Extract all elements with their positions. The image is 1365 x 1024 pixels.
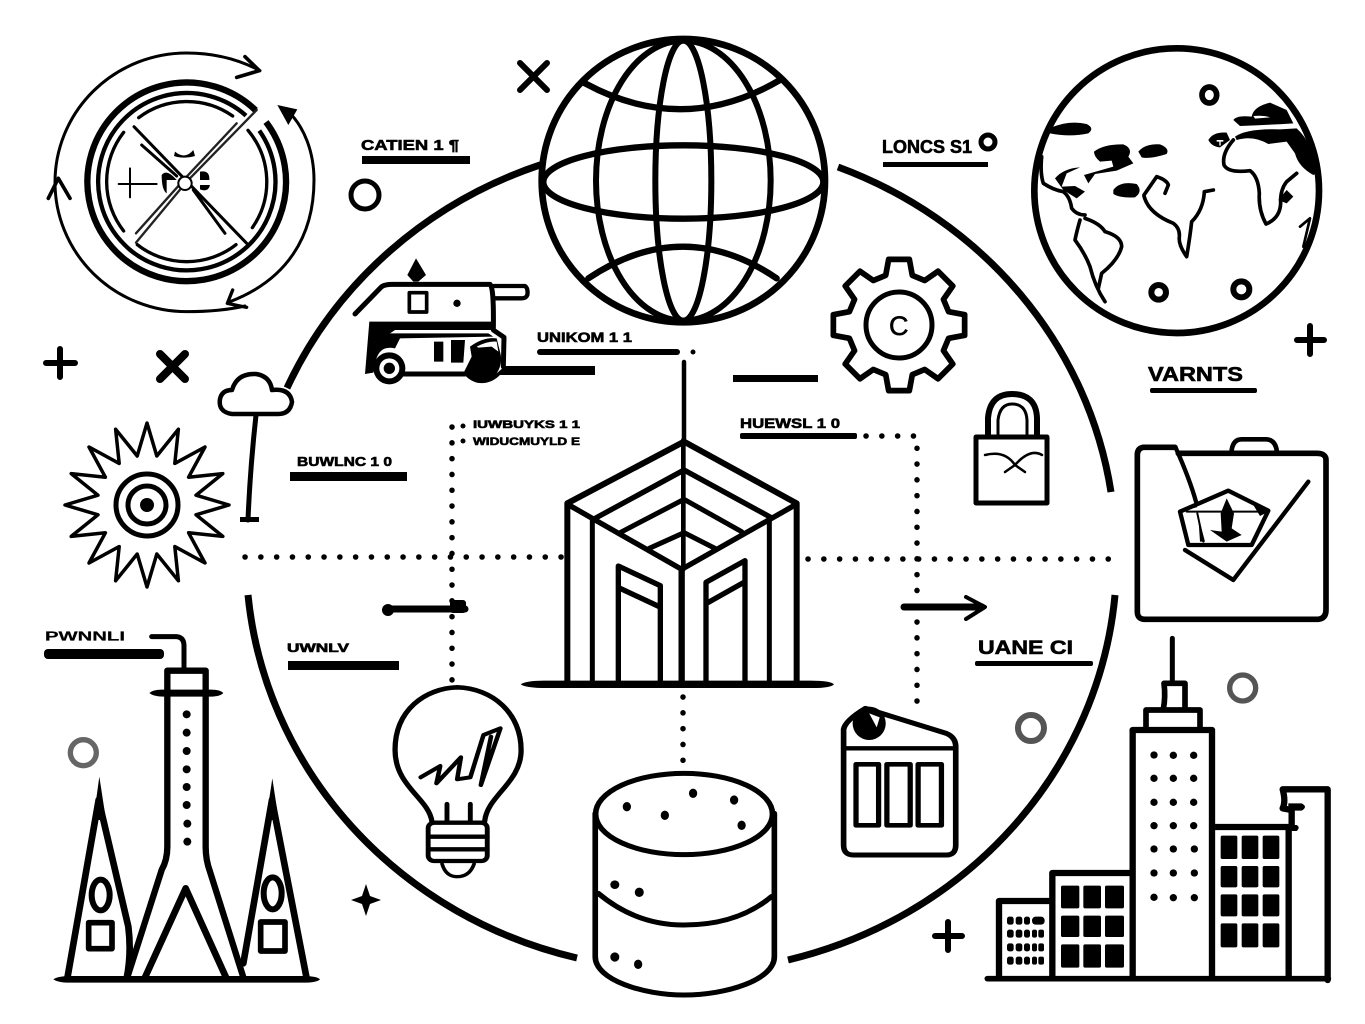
label: two line caption: WIDUCMUYLD E <box>473 436 580 448</box>
connector stem and dot <box>684 350 696 440</box>
icon: circular cycle dial with arrows <box>48 53 314 312</box>
label: left lower: UWNLV <box>287 641 349 655</box>
icon: card with bars <box>844 707 956 855</box>
icon: x mark top <box>520 63 547 90</box>
label: centre top: UNIKOM 1 1 <box>537 329 632 345</box>
label: arrow left <box>382 600 466 616</box>
bottom icons: bulb, database, card <box>395 687 956 995</box>
label: top right with ring <box>882 135 995 167</box>
icon: wireframe globe <box>542 39 825 322</box>
gray ring near city <box>1018 715 1044 741</box>
label: VARNTS: VARNTS <box>1148 364 1243 386</box>
bar marker <box>733 375 818 382</box>
label: VARNTS <box>1148 364 1257 393</box>
icon: plus bottom <box>935 922 962 950</box>
label: tower top <box>44 629 164 659</box>
label: centre top <box>537 329 680 355</box>
label: UANE: UANE CI <box>978 638 1073 659</box>
label: top left <box>361 137 470 164</box>
central building icon <box>521 440 834 688</box>
label: tower top: PWNNLI <box>45 629 125 644</box>
label: right of building: HUEWSL 1 0 <box>740 415 840 431</box>
icon: sparkle <box>351 884 381 916</box>
label: UANE <box>975 638 1093 666</box>
icon: world map globe <box>1034 48 1319 333</box>
label: top left: CATIEN 1 ¶ <box>361 137 459 154</box>
large enclosing circle <box>248 164 1115 960</box>
icon: cloud on stem <box>220 374 292 522</box>
icon: church / tower cluster <box>44 629 320 983</box>
icon: gear with letter C <box>833 259 965 391</box>
ring decoration <box>351 181 379 209</box>
icon: database cylinder <box>595 773 774 995</box>
arrow right <box>904 597 985 619</box>
label: two line caption: IUWBUYKS 1 1 <box>473 419 580 431</box>
label: right of building <box>740 415 857 439</box>
icon: city skyline <box>987 638 1328 980</box>
label: left lower <box>287 641 399 670</box>
icon: light bulb <box>395 687 521 877</box>
label: top right with ring: LONCS S1 <box>882 137 972 157</box>
icon: gear with letter C: C <box>889 311 908 341</box>
icon: plus left <box>46 349 75 377</box>
label: left middle <box>290 454 407 481</box>
label: two line caption <box>473 419 580 448</box>
icon: plus right <box>1297 326 1324 354</box>
icon: delivery truck <box>355 258 595 384</box>
label: left middle: BUWLNC 1 0 <box>297 454 392 469</box>
dotted connector lines <box>245 424 1112 762</box>
icon: spiky sun <box>65 423 229 587</box>
icon: padlock <box>976 394 1047 503</box>
icon: briefcase with check and shield <box>1137 439 1326 619</box>
icon: x mark left <box>160 354 185 379</box>
